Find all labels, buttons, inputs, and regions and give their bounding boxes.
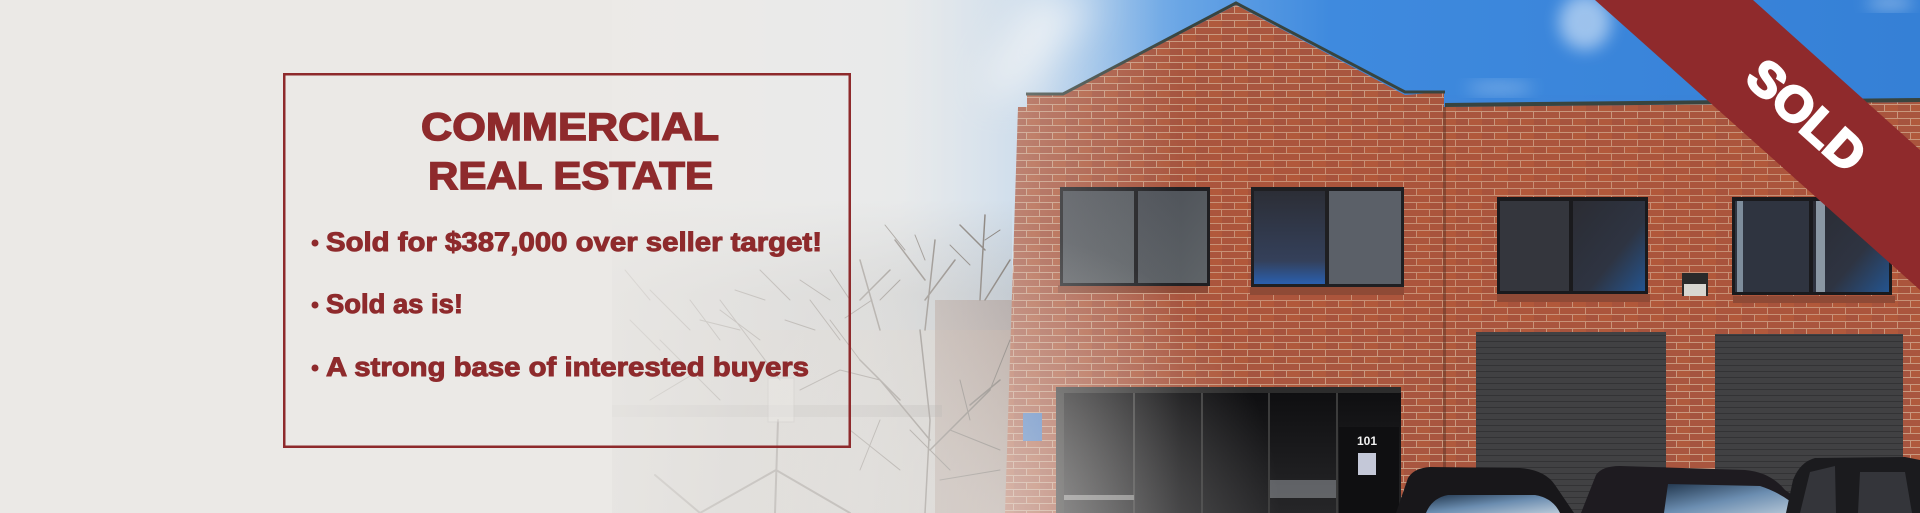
roof coping [1026, 3, 1920, 105]
fade overlay across photo [612, 0, 1182, 513]
upper window 2 [1251, 187, 1404, 287]
building: right section [1444, 102, 1920, 513]
parked car 2 [1581, 466, 1818, 513]
garage door 2 [1715, 334, 1903, 513]
entry door with number 101 [1339, 427, 1399, 513]
bottom-left photo fade [720, 233, 1280, 513]
upper window 3 [1497, 197, 1648, 294]
shopfront [1056, 387, 1401, 513]
heading [421, 106, 719, 198]
heading: COMMERCIAL [421, 106, 719, 149]
parked car 3 [1786, 457, 1920, 513]
bullet: condition: Sold as is! [326, 289, 463, 319]
window sills [1058, 285, 1895, 303]
panel: property details [284, 74, 850, 447]
brick tone wash [1200, 130, 1920, 330]
garage door 1 [1476, 332, 1666, 513]
bullet: price: Sold for $387,000 over seller target! [326, 227, 822, 257]
upper window 4 [1732, 197, 1892, 295]
heading: REAL ESTATE [428, 155, 713, 198]
wall light [1682, 273, 1708, 296]
accessible parking sign [1023, 413, 1042, 441]
sky [612, 0, 1920, 330]
parked car 1 [1396, 467, 1574, 513]
sold ribbon [1595, 0, 1920, 290]
entry door with number 101: 101 [1357, 434, 1377, 448]
sold label: SOLD [1736, 49, 1876, 183]
building: gabled section [1005, 5, 1444, 513]
upper window 1 [1060, 187, 1210, 286]
bullet: buyers: A strong base of interested buyers [326, 352, 809, 382]
wall shadow at section junction [1443, 107, 1446, 513]
background trees and neighbouring building [612, 200, 1020, 513]
photo: building and sky [612, 0, 1920, 513]
clouds [980, 0, 1914, 100]
